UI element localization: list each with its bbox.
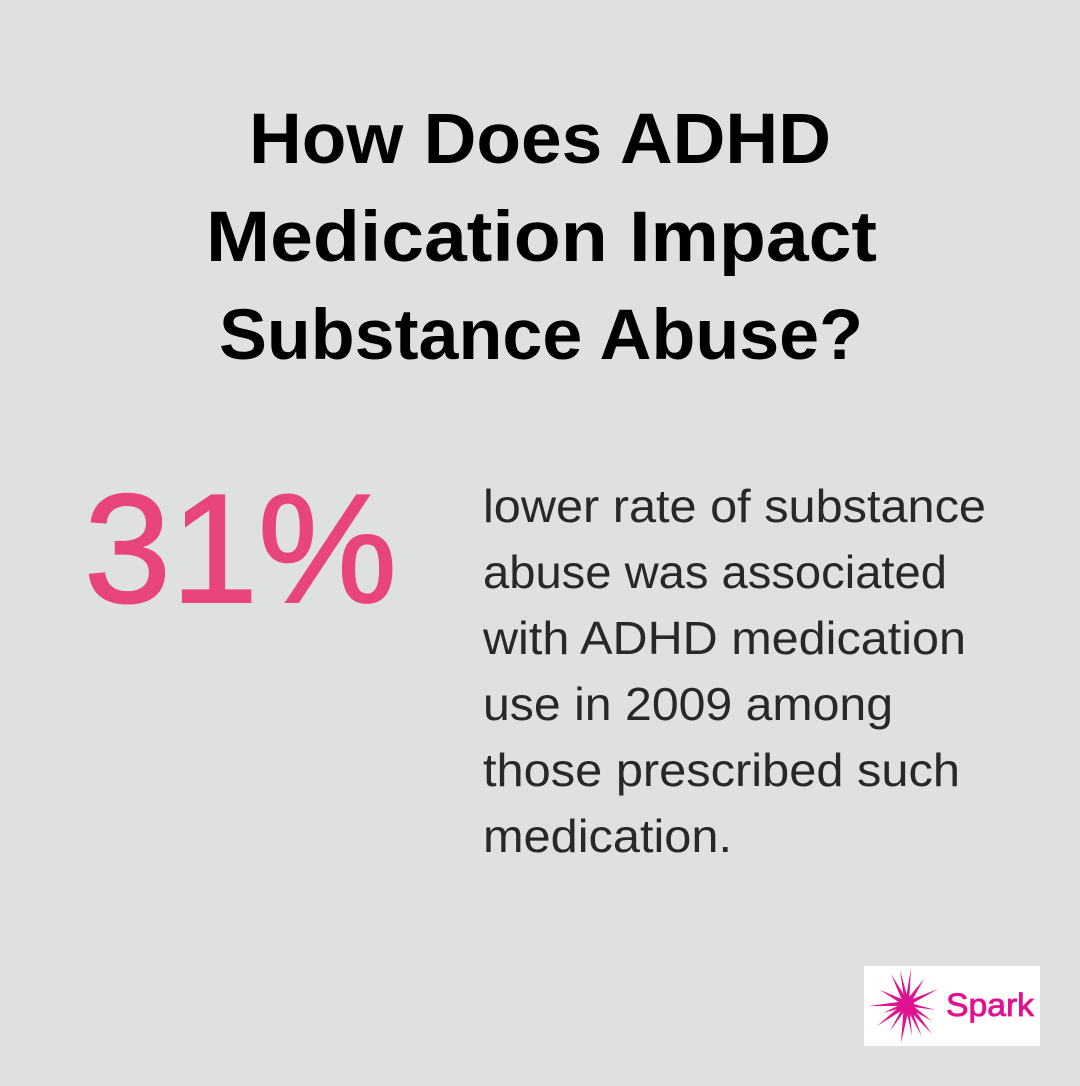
title: Medication Impact <box>206 198 877 277</box>
logo: Spark <box>864 966 1040 1046</box>
title: How Does ADHD <box>249 100 831 179</box>
description text <box>482 480 986 862</box>
icon: starburst <box>869 968 938 1043</box>
description text: with ADHD medication <box>482 612 966 664</box>
description text: abuse was associated <box>483 546 947 598</box>
statistic: 31%: 31% <box>84 462 397 635</box>
description text: those prescribed such <box>483 744 960 796</box>
logo wordmark: Spark <box>946 987 1035 1023</box>
description text: use in 2009 among <box>483 678 893 730</box>
title <box>206 100 877 375</box>
description text: medication. <box>483 810 732 862</box>
title: Substance Abuse? <box>219 296 863 375</box>
description text: lower rate of substance <box>483 480 986 532</box>
